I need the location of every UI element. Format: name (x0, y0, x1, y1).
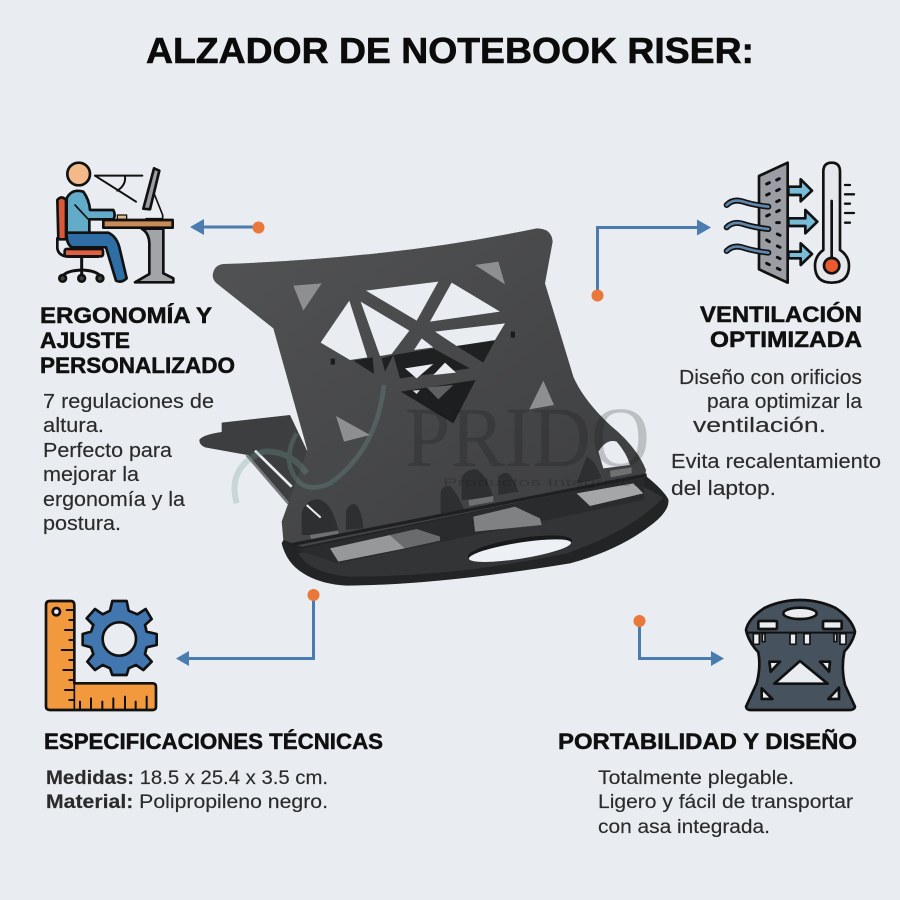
body text (43, 391, 214, 535)
body text: Material: Polipropileno negro. (46, 792, 328, 813)
body text: Perfecto para (43, 440, 173, 462)
watermark tagline: Productos Integrales (443, 477, 644, 489)
heading: PORTABILIDAD Y DISEÑO (558, 729, 857, 754)
title: ALZADOR DE NOTEBOOK RISER: (146, 30, 754, 71)
icon: airflow and thermometer (727, 163, 854, 283)
section: ventilation: OPTIMIZADA (710, 327, 862, 352)
section: ergonomics (40, 163, 264, 535)
section: ergonomics: PERSONALIZADO (40, 353, 235, 378)
body text: Diseño con orificios (679, 367, 862, 389)
watermark word: PRIDO (405, 389, 650, 485)
section: specifications (44, 589, 383, 813)
body text: Ligero y fácil de transportar (598, 792, 854, 813)
grey corner triangles (293, 283, 322, 311)
ventilation openings (366, 282, 438, 321)
body text: mejorar la (43, 464, 140, 486)
section: ventilation (592, 163, 881, 500)
grip handle (466, 530, 574, 566)
body text: del laptop. (671, 478, 776, 500)
icon: folded stand (746, 600, 855, 710)
body text (598, 768, 854, 838)
watermark leaf (235, 385, 384, 503)
body text: para optimizar la (707, 391, 863, 413)
hinge slots (302, 499, 338, 535)
body text: Evita recalentamiento (671, 451, 881, 473)
body text (671, 367, 881, 500)
arrow: ventilation connector (592, 220, 711, 302)
body text: altura. (43, 415, 104, 437)
front tray (282, 477, 668, 586)
icon: ruler and gear (46, 601, 157, 710)
body text: ergonomía y la (43, 489, 186, 511)
body text: con asa integrada. (598, 817, 770, 838)
heading: ERGONOMÍA Y (40, 303, 212, 328)
arrow: ergonomics connector (190, 219, 264, 235)
body text: 7 regulaciones de (43, 391, 214, 413)
watermark: PRIDO logo (235, 385, 650, 503)
heading: ESPECIFICACIONES TÉCNICAS (44, 729, 383, 754)
product image: notebook riser stand (199, 228, 668, 586)
section: ergonomics: AJUSTE (40, 328, 130, 353)
body text: ventilación. (693, 415, 826, 437)
body text: postura. (43, 513, 121, 535)
body text: Totalmente plegable. (598, 768, 794, 789)
section: portability (558, 600, 857, 838)
rear support plate (199, 415, 308, 507)
body text (46, 768, 328, 813)
icon: person at desk (57, 163, 173, 282)
arrow: portability connector (634, 615, 724, 666)
arrow: specifications connector (176, 589, 320, 666)
heading: VENTILACIÓN (700, 302, 862, 327)
body text: Medidas: 18.5 x 25.4 x 3.5 cm. (46, 768, 328, 789)
main tilted panel (213, 228, 646, 547)
